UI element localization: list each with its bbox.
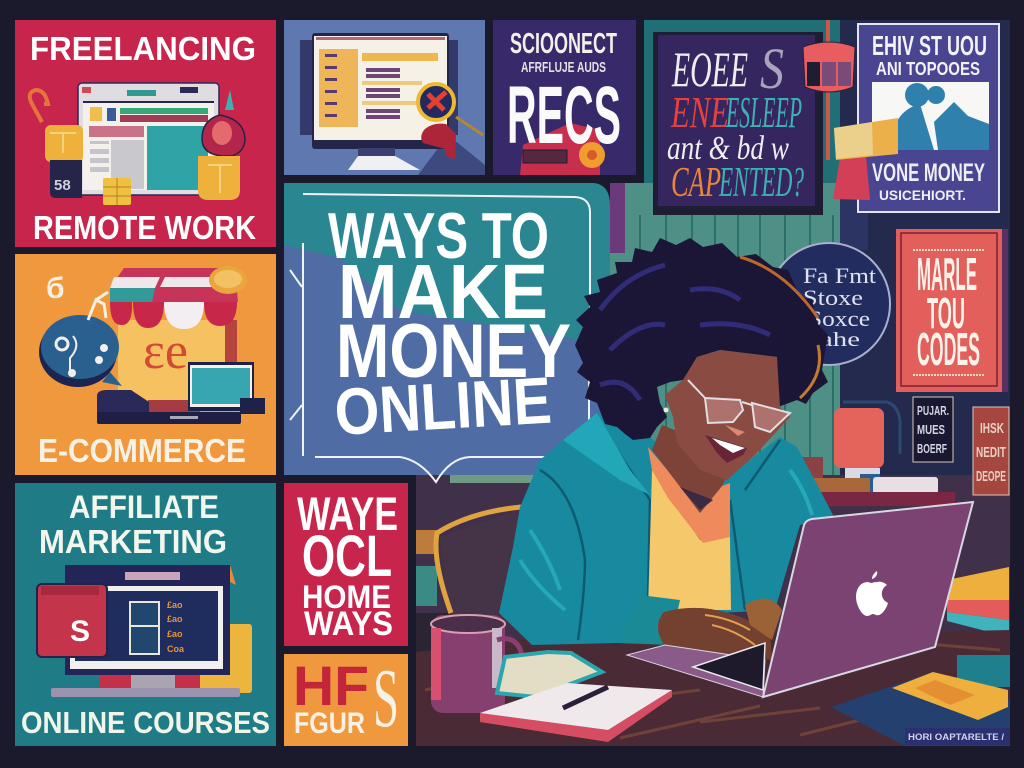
icon: yellow mug left: 58 (54, 177, 71, 194)
face (665, 350, 790, 480)
icon: notebook with pen (480, 683, 672, 742)
hand (658, 608, 772, 660)
icon: red apple (202, 90, 245, 156)
icon: gold coin sign (209, 266, 247, 294)
heading: affiliate marketing: MARKETING (39, 523, 227, 560)
scene wall background (416, 20, 1010, 746)
scene: workspace illustration (416, 20, 1010, 746)
poster: vone money: ANI TOPOOES (876, 59, 980, 79)
icon: browser window (78, 83, 219, 195)
panel: affiliate marketing and online courses (15, 483, 276, 746)
icon: apple logo (856, 571, 888, 616)
text: recs: RECS (507, 70, 621, 161)
label: remote work: REMOTE WORK (33, 209, 256, 246)
poster: marle tou codes: TOU (927, 289, 965, 338)
speech bubble outline (290, 194, 590, 482)
panel: red waye ocl home ways: WAYE (297, 487, 398, 540)
title: ways to make money online: MAKE (338, 249, 548, 335)
sign: small dark poster: MUES (917, 422, 945, 437)
icon: hanging red lamp (803, 20, 870, 200)
poster: vone money: USICEHIORT. (879, 187, 966, 203)
heading: freelancing: FREELANCING (30, 30, 256, 67)
sign: round navy: Stoxe (803, 285, 863, 310)
table (416, 630, 1010, 746)
panel: red waye ocl home ways (284, 483, 408, 646)
title: ways to make money online (328, 199, 571, 449)
icon: printer base (97, 390, 241, 424)
icon: yellow folder (200, 624, 252, 693)
icon: yellow mug left (30, 90, 83, 198)
icon: laptop (188, 362, 265, 414)
poster: vone money (858, 24, 999, 212)
sign: small dark poster: PUJAR. (917, 403, 949, 418)
label: e-commerce: E-COMMERCE (38, 432, 246, 469)
icon: coffee machine (800, 402, 900, 496)
book label (905, 728, 1010, 745)
chair (436, 507, 521, 640)
poster: colorful lettering: ESLEEP (726, 88, 802, 137)
t-shirt (648, 470, 731, 610)
icon: coffee mug (431, 615, 522, 713)
panel: e-commerce (15, 254, 276, 475)
poster: colorful lettering: CAP (671, 160, 721, 206)
label: online courses: ONLINE COURSES (21, 705, 270, 740)
sign: round navy: Fa Fmt (803, 263, 876, 288)
poster: colorful lettering: EOEE (671, 41, 748, 97)
sign: round navy: ahe (820, 329, 860, 351)
panel: purple recs poster (493, 20, 636, 175)
title: ways to make money online: WAYS TO (328, 199, 549, 272)
chart labels on screen: £ao (167, 614, 183, 624)
sign: round navy: Soxce (808, 306, 870, 331)
sign: small dark poster: BOERF (917, 441, 947, 456)
title: ways to make money online: ONLINE (333, 363, 553, 449)
panel: monitor with magnifier (284, 20, 485, 175)
sign: small dark poster (913, 397, 953, 462)
person: woman working on a laptop (499, 238, 834, 660)
panel: orange fgur (284, 652, 408, 746)
icon: folded note (497, 652, 602, 697)
heading: affiliate marketing (39, 489, 227, 560)
sign: small red poster (973, 407, 1009, 495)
sign: small red poster: NEDIT (976, 444, 1006, 461)
panel: orange fgur: HF (293, 654, 369, 717)
chart labels on screen: £ao (167, 600, 183, 610)
panel: red waye ocl home ways: WAYS (304, 605, 393, 643)
poster: colorful lettering (653, 32, 823, 215)
icon: currency marks: б (46, 272, 65, 305)
icon: storefront: εe (143, 323, 188, 380)
icon: storefront (110, 268, 238, 415)
icon: chat bubble with question mark (39, 315, 122, 387)
icon: desktop monitor (300, 33, 458, 170)
icon: red briefcase (37, 584, 107, 657)
icon: currency marks (46, 272, 108, 320)
panel: orange fgur: FGUR (294, 707, 365, 740)
glasses (688, 380, 790, 432)
poster: marle tou codes (896, 229, 1008, 392)
icon: small camera (523, 142, 605, 168)
sign: small red poster: IHSK (980, 420, 1004, 437)
panel: main title (284, 183, 610, 482)
poster: colorful lettering: S (760, 36, 784, 101)
chart labels on screen (167, 600, 185, 654)
neck (652, 425, 730, 513)
text: sciocnect: SCIOONECT (510, 28, 617, 60)
chart labels on screen: £ao (167, 629, 183, 639)
chart labels on screen: Coa (167, 644, 185, 654)
icon: yellow pot (198, 156, 240, 200)
hair (575, 238, 828, 440)
poster: colorful lettering: ant & bd w (667, 130, 789, 167)
panel: red waye ocl home ways: HOME (302, 579, 391, 615)
icon: magnifying glass and hand (418, 84, 483, 159)
sleeve cuff (618, 595, 680, 645)
card: colourful note (834, 118, 898, 160)
hoodie (499, 413, 834, 645)
text: afrfluje auds: AFRFLUJE AUDS (521, 59, 606, 76)
icon: laptop (627, 502, 973, 697)
title: ways to make money online: MONEY (336, 309, 571, 394)
icon: small coins (103, 178, 131, 205)
heading: affiliate marketing: AFFILIATE (69, 489, 219, 525)
books: right side stack (947, 567, 1009, 637)
icon: blue book and yellow wallet (831, 655, 1010, 746)
poster: colorful lettering: ENE (670, 88, 729, 137)
poster: colorful lettering: ENTED? (718, 160, 804, 206)
panel: red waye ocl home ways: OCL (302, 524, 392, 589)
panel: orange fgur: S (373, 652, 399, 745)
icon: red briefcase: S (70, 615, 90, 648)
sign: round navy (768, 243, 890, 365)
poster photo silhouettes (890, 83, 989, 150)
panel: freelancing and remote work (15, 20, 276, 247)
icon: red shape behind lettering (520, 123, 600, 175)
icon: monitor (51, 565, 240, 697)
icon: blue book and yellow wallet: HORI OAPTARELTE / (908, 732, 1005, 742)
icon: stack of papers on shelf (805, 477, 955, 506)
